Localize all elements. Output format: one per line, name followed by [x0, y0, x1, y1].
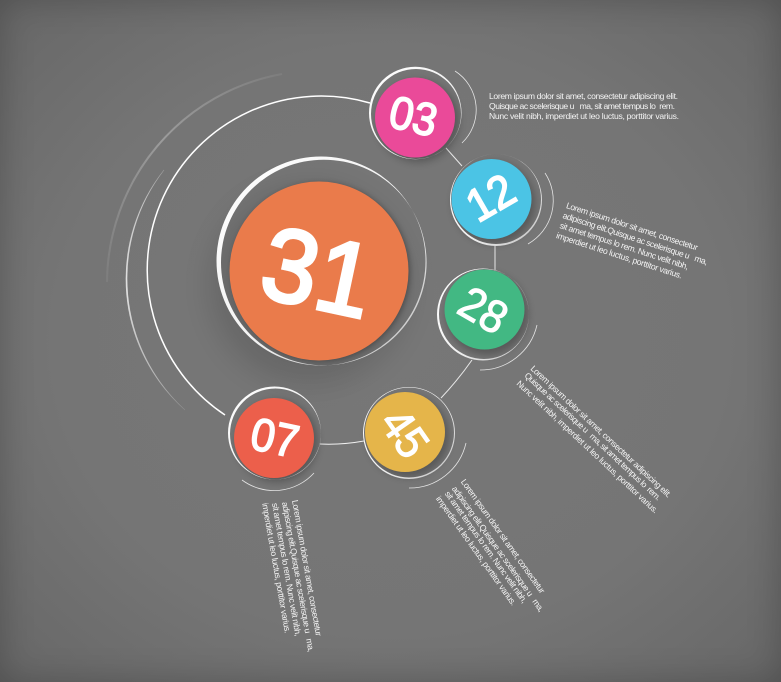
arc 28	[480, 325, 537, 370]
arc 07	[242, 473, 314, 491]
text block 45: adipiscing elit.Quisque ac scelerisque u ma,	[450, 484, 546, 614]
text block 03	[489, 91, 679, 121]
text block 03: Quisque ac scelerisque u ma, sit amet tempus lo rem.	[489, 101, 675, 111]
node 12	[450, 154, 553, 246]
text block 12: adipiscing elit.Quisque ac scelerisque u ma,	[561, 210, 709, 267]
text block 07: Lorem ipsum dolor sit amet, consectetur	[290, 499, 324, 637]
text block 45: Lorem ipsum dolor sit amet, consectetur	[459, 477, 547, 595]
text block 28: Lorem ipsum dolor sit amet, consectetur adipiscing elit.	[529, 363, 674, 500]
central circle 31	[210, 156, 427, 385]
arc 45	[409, 443, 466, 488]
text block 07: imperdiet ut leo luctus, porttitor varius.	[260, 502, 293, 634]
number 03: 03	[384, 87, 442, 147]
text block 45: sit amet tempus lo rem. Nunc velit nibh,	[443, 489, 529, 605]
node 28	[437, 268, 537, 370]
connecting orbit ring	[147, 96, 495, 444]
node 07	[228, 386, 321, 491]
arc 12	[528, 173, 553, 244]
number 07: 07	[246, 409, 303, 468]
text block 03: Nunc velit nibh, imperdiet ut leo luctus, porttitor varius.	[489, 111, 679, 121]
text block 07	[260, 499, 324, 653]
arc 03	[455, 71, 476, 143]
text block 12: sit amet tempus lo rem. Nunc velit nibh,	[558, 220, 690, 271]
number 45: 45	[370, 400, 439, 468]
text block 07: adipiscing elit.Quisque ac scelerisque u ma,	[280, 501, 316, 653]
outer decorative arc	[107, 74, 282, 282]
text block 45: imperdiet ut leo luctus, porttitor varius.	[434, 494, 519, 607]
number 28: 28	[450, 277, 516, 345]
text block 12: Lorem ipsum dolor sit amet, consectetur	[565, 200, 699, 252]
text block 28: Quisque ac scelerisque u ma, sit amet tempus lo rem.	[523, 370, 663, 502]
node 45	[363, 387, 466, 488]
text block 12: imperdiet ut leo luctus, porttitor varius.	[555, 230, 684, 281]
text block 12	[555, 200, 709, 281]
number 12: 12	[458, 164, 524, 232]
text block 07: sit amet tempus lo rem. Nunc velit nibh,	[270, 502, 303, 637]
node 03	[369, 67, 476, 162]
text block 03: Lorem ipsum dolor sit amet, consectetur adipiscing elit.	[489, 91, 678, 101]
number 31: 31	[252, 205, 383, 341]
text block 28: Nunc velit nibh, imperdiet ut leo luctus, porttitor varius.	[515, 378, 660, 515]
middle decorative arc	[126, 170, 185, 410]
